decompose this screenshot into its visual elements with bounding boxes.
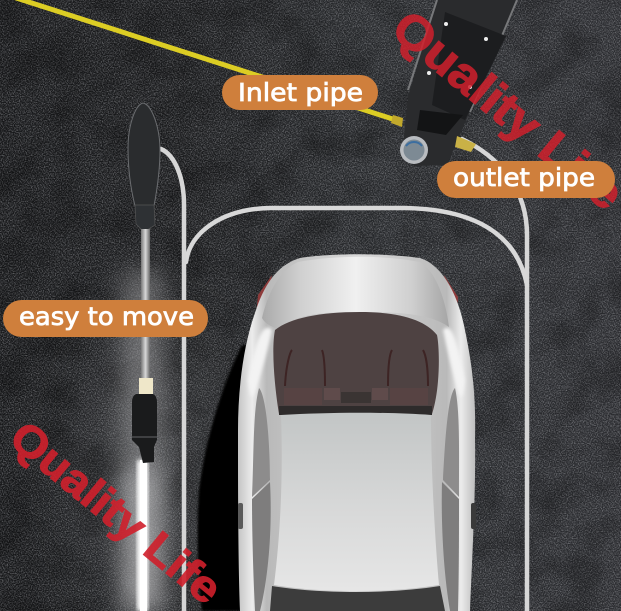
metal shaft	[141, 229, 150, 379]
handle	[128, 103, 160, 206]
spray wand	[128, 103, 160, 463]
label: easy to move	[3, 300, 208, 337]
cream collar	[139, 378, 153, 395]
spray wand glow	[122, 270, 162, 611]
roof panel	[274, 413, 439, 591]
rear window glass	[273, 312, 439, 414]
white hose loop	[161, 139, 527, 611]
brass outlet fitting	[455, 136, 476, 152]
pressure washer pump	[391, 0, 517, 166]
yellow inlet pipe	[10, 0, 402, 122]
label: outlet pipe: outlet pipe	[453, 163, 595, 192]
label: inlet pipe: Inlet pipe	[238, 78, 363, 107]
body highlights	[248, 328, 272, 397]
brass inlet fitting	[391, 115, 403, 127]
windscreen	[270, 586, 445, 611]
black coupler	[132, 394, 157, 463]
label: inlet pipe	[222, 75, 378, 110]
right side glass	[443, 388, 459, 497]
seats	[284, 350, 428, 405]
car	[238, 254, 476, 611]
side mirrors	[238, 503, 243, 529]
label: easy to move: easy to move	[19, 302, 194, 331]
watermark: top right: Quality Life	[382, 1, 621, 221]
hood	[262, 257, 449, 330]
pressure gauge	[400, 136, 428, 164]
red lights	[256, 275, 272, 316]
label: outlet pipe	[437, 161, 615, 198]
body	[238, 254, 475, 611]
watermark: bottom left: Quality Life	[1, 412, 231, 611]
left side glass	[252, 388, 270, 497]
car shadow	[198, 345, 250, 611]
